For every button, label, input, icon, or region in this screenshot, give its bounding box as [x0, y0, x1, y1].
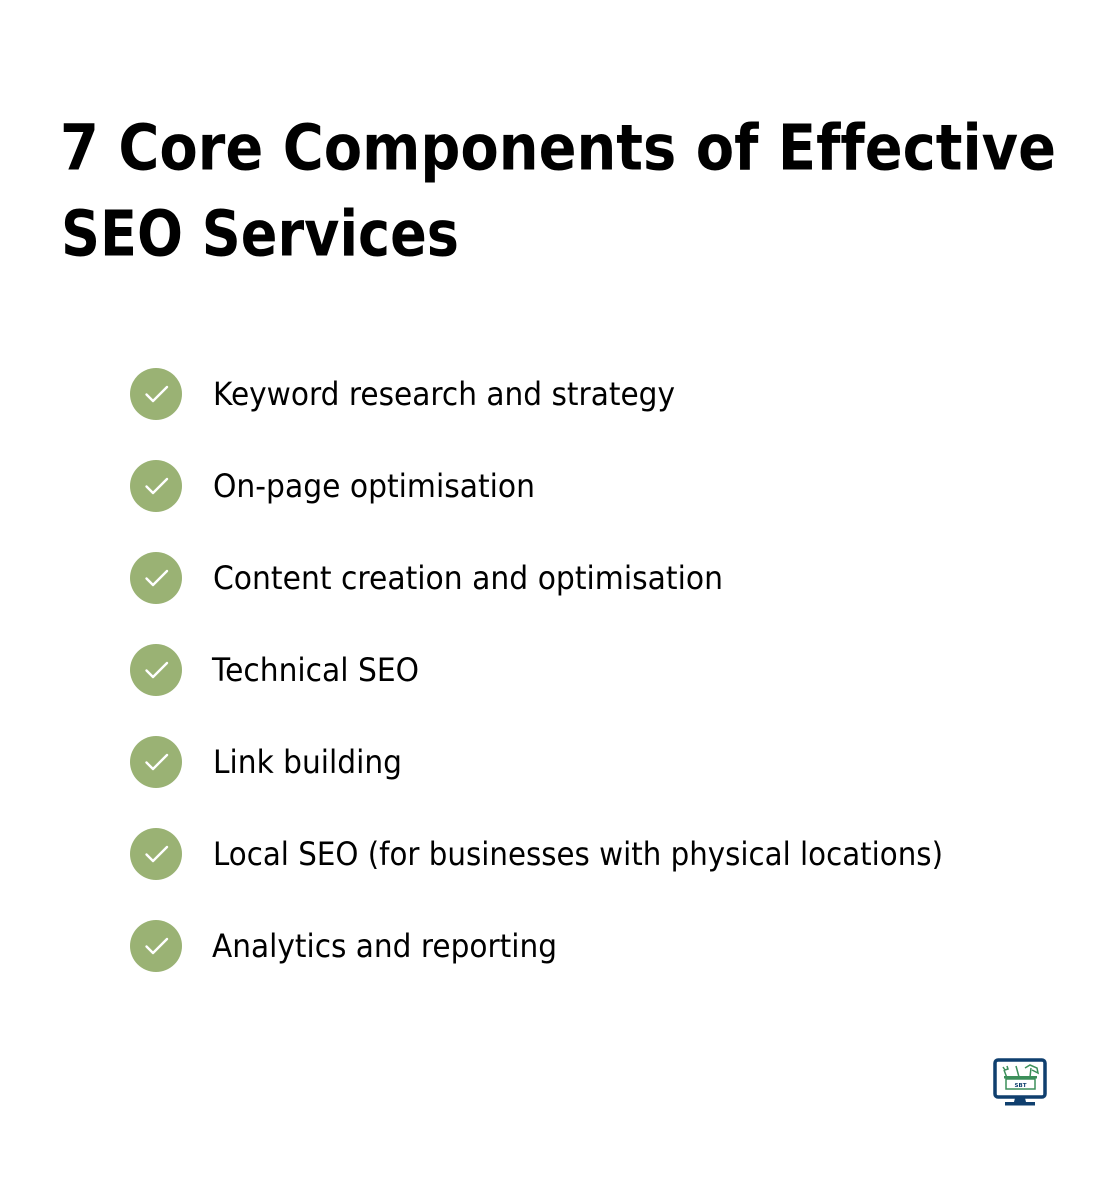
item: content creation: [130, 552, 723, 604]
item: analytics: Analytics and reporting: [212, 927, 557, 965]
item: on-page optimisation: [130, 460, 535, 512]
item: on-page optimisation: On-page optimisation: [213, 467, 535, 505]
item: technical seo: [130, 644, 419, 696]
item: content creation: Content creation and optimisation: [213, 559, 723, 597]
item: local seo: Local SEO (for businesses with physical locations): [213, 835, 943, 873]
item: link building: [130, 736, 402, 788]
item: technical seo: Technical SEO: [211, 651, 419, 689]
icon: logo monitor with toolbox: SBT: [1015, 1083, 1027, 1089]
item: keyword research: [130, 368, 675, 420]
item: analytics: [130, 920, 557, 972]
item: link building: Link building: [213, 743, 402, 781]
item: keyword research: Keyword research and strategy: [213, 375, 675, 413]
title: SEO Services: [61, 198, 459, 270]
checklist: [130, 368, 943, 972]
icon: logo monitor with toolbox: [995, 1060, 1045, 1106]
title: [60, 112, 1056, 270]
item: local seo: [130, 828, 943, 880]
